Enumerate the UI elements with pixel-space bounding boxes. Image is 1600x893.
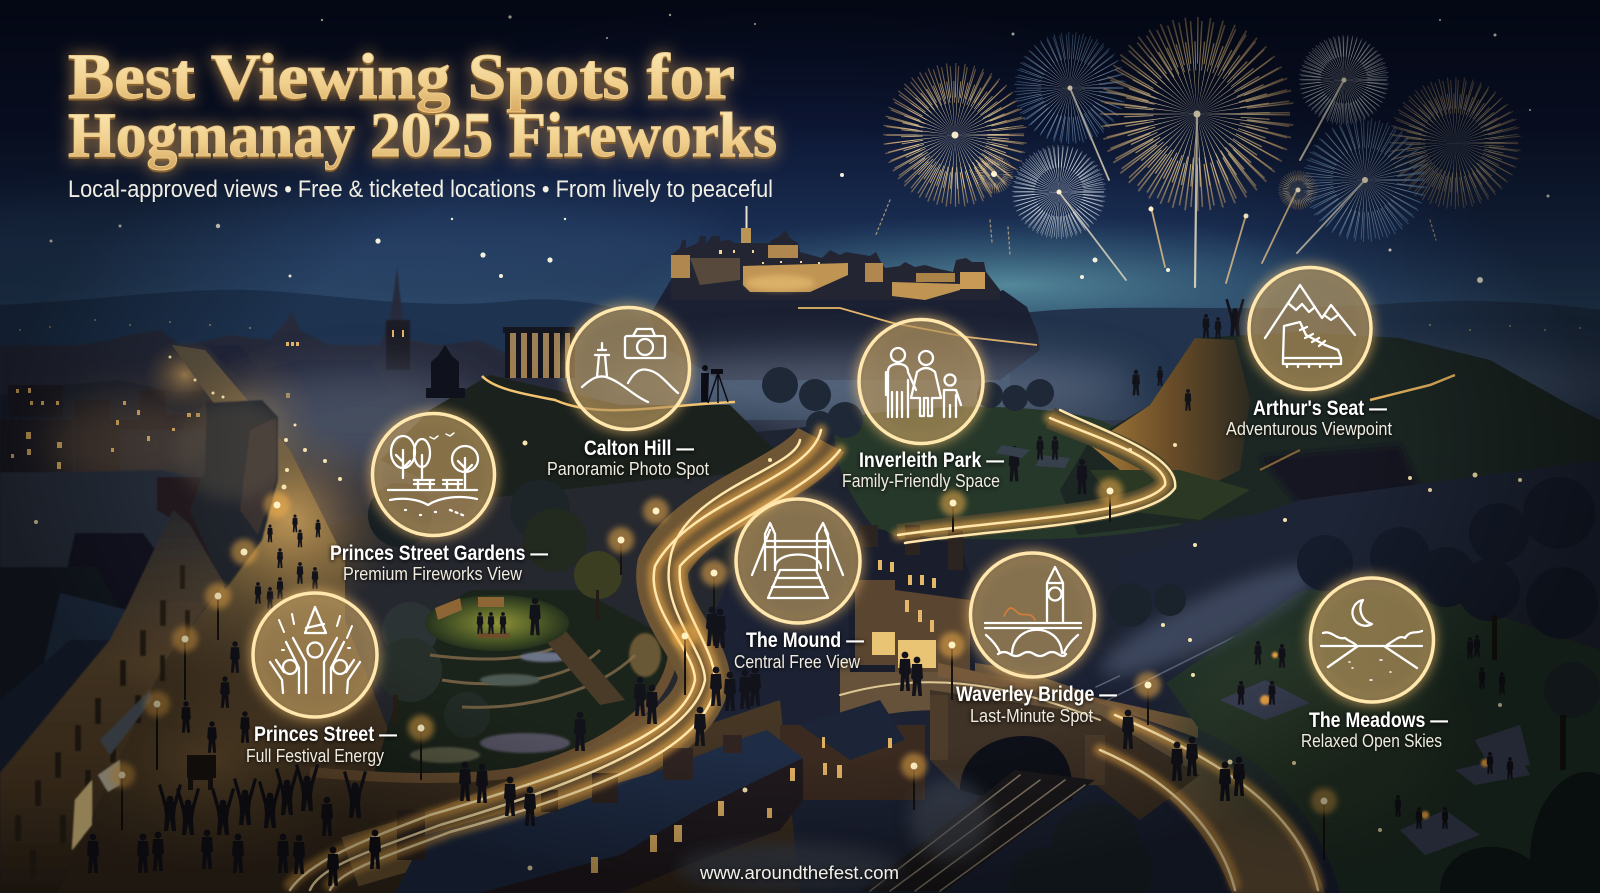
Arthur's Seat hill <box>1060 332 1600 535</box>
icon: bridge and stairs <box>752 523 843 598</box>
label: The Mound: The Mound — <box>746 629 864 652</box>
icon: monument and camera <box>582 329 678 402</box>
meadows mist <box>1091 548 1329 692</box>
icon: moon over open field <box>1321 600 1422 680</box>
castle rock <box>650 278 1040 380</box>
meadows picnics <box>1220 635 1530 855</box>
meadows lawn <box>1166 587 1600 893</box>
distant city lights <box>19 319 1581 331</box>
label: Calton Hill <box>547 437 709 479</box>
waverley bridge <box>930 663 1200 820</box>
label: Waverley Bridge: Last-Minute Spot <box>970 706 1093 726</box>
label: Waverley Bridge: Waverley Bridge — <box>956 683 1117 706</box>
photographer with tripod <box>701 365 728 403</box>
label: Inverleith Park: Inverleith Park — <box>859 449 1004 472</box>
foggy roofs <box>0 470 210 640</box>
light strands <box>290 410 1318 890</box>
marker: Calton Hill <box>547 308 709 479</box>
tan tenement facade <box>0 510 225 893</box>
icon: family <box>886 348 961 417</box>
label: Arthur's Seat: Adventurous Viewpoint <box>1226 419 1392 439</box>
icon: mountain and boot <box>1265 285 1355 367</box>
railway tracks <box>860 590 1312 891</box>
label: Princes Street <box>246 723 397 766</box>
label: Waverley Bridge <box>956 683 1117 726</box>
city windows <box>11 330 404 469</box>
firework trails <box>875 80 1436 287</box>
icon: trees and benches <box>388 433 478 516</box>
marker: Inverleith Park <box>842 320 1004 491</box>
bottom mist <box>680 780 990 892</box>
label: Calton Hill: Calton Hill — <box>584 437 694 460</box>
Inverleith park lawn <box>834 407 1190 539</box>
website url: www.aroundthefest.com <box>699 863 899 883</box>
title <box>68 41 777 170</box>
meadows mist backdrop <box>1120 460 1600 680</box>
festival crowd <box>87 514 1245 886</box>
label: Princes Street Gardens: Premium Fireworks View <box>343 564 523 584</box>
street lamps <box>109 478 1337 860</box>
label: Inverleith Park <box>842 449 1004 491</box>
garden trees <box>368 480 622 738</box>
city blocks <box>0 385 220 480</box>
house by the bridge <box>780 700 925 800</box>
label: The Mound <box>734 629 864 672</box>
old town skyline <box>0 268 600 560</box>
trees behind park <box>762 367 1054 439</box>
old town warm fog <box>45 340 225 495</box>
lit castle walls <box>671 245 985 300</box>
label: Princes Street Gardens: Princes Street Gardens — <box>330 542 548 565</box>
icon: party crowd <box>270 607 360 693</box>
tall dark building <box>190 400 278 590</box>
subtitle: Local-approved views • Free & ticketed locations • From lively to peaceful <box>68 176 773 203</box>
marker: The Mound <box>734 499 864 672</box>
castle path light <box>798 308 1037 345</box>
marker: Waverley Bridge <box>956 553 1117 726</box>
benches and visitors <box>435 597 541 638</box>
fireworks display <box>875 40 1505 287</box>
mid-ground terrain <box>280 420 1600 893</box>
road: cobbled bands <box>350 418 1325 893</box>
tree near the mound <box>712 510 768 570</box>
garden steps <box>545 630 625 705</box>
floating light specks <box>34 356 1522 870</box>
hikers and park figures <box>996 299 1245 494</box>
street warm haze <box>40 350 400 870</box>
marker: Princes Street <box>246 593 397 766</box>
Dugald Stewart monument <box>426 345 465 398</box>
bridge foliage <box>1010 803 1152 893</box>
label: Princes Street: Princes Street — <box>254 723 397 746</box>
distant hills <box>0 290 1600 420</box>
tenement windows <box>15 565 190 878</box>
garden lawn <box>425 595 569 651</box>
Edinburgh Castle <box>671 206 1037 345</box>
glow halo <box>290 418 1318 885</box>
castle silhouette <box>671 230 1000 300</box>
label: Princes Street: Full Festival Energy <box>246 746 384 766</box>
marker: The Meadows <box>1301 578 1448 751</box>
label: Princes Street Gardens <box>330 542 548 584</box>
glowing paths <box>290 410 1318 890</box>
label: Calton Hill: Panoramic Photo Spot <box>547 459 709 479</box>
label: The Meadows <box>1301 709 1448 751</box>
label: Inverleith Park: Family-Friendly Space <box>842 471 1000 491</box>
tenement fog <box>175 400 295 500</box>
terrace walls <box>310 640 673 778</box>
slate roof <box>0 640 110 773</box>
National Monument columns <box>503 327 575 378</box>
princes street gardens <box>310 480 673 780</box>
foreground corner foliage <box>1440 772 1600 893</box>
flower beds <box>410 633 661 763</box>
marker: Princes Street Gardens <box>330 414 548 584</box>
Princes Street road surface <box>57 345 800 893</box>
label: The Meadows: Relaxed Open Skies <box>1301 731 1442 751</box>
label: Arthur's Seat <box>1226 397 1392 439</box>
left tenement buildings <box>0 400 278 893</box>
mist band <box>230 353 1600 480</box>
title: Hogmanay 2025 Fireworks <box>68 100 777 170</box>
icon: clock tower and bridge <box>985 567 1081 656</box>
dark brick block <box>157 477 240 590</box>
meadows trees <box>1010 477 1600 893</box>
buildings beside the mound <box>846 525 975 672</box>
label: The Mound: Central Free View <box>734 652 861 672</box>
Calton Hill <box>380 327 790 500</box>
carriage <box>187 755 216 790</box>
label: The Meadows: The Meadows — <box>1309 709 1448 732</box>
stars <box>50 14 1550 332</box>
marker: Arthur's Seat <box>1226 268 1392 439</box>
foreground rooftops <box>395 730 803 893</box>
label: Arthur's Seat: Arthur's Seat — <box>1253 397 1387 420</box>
title: Best Viewing Spots for <box>68 41 735 113</box>
